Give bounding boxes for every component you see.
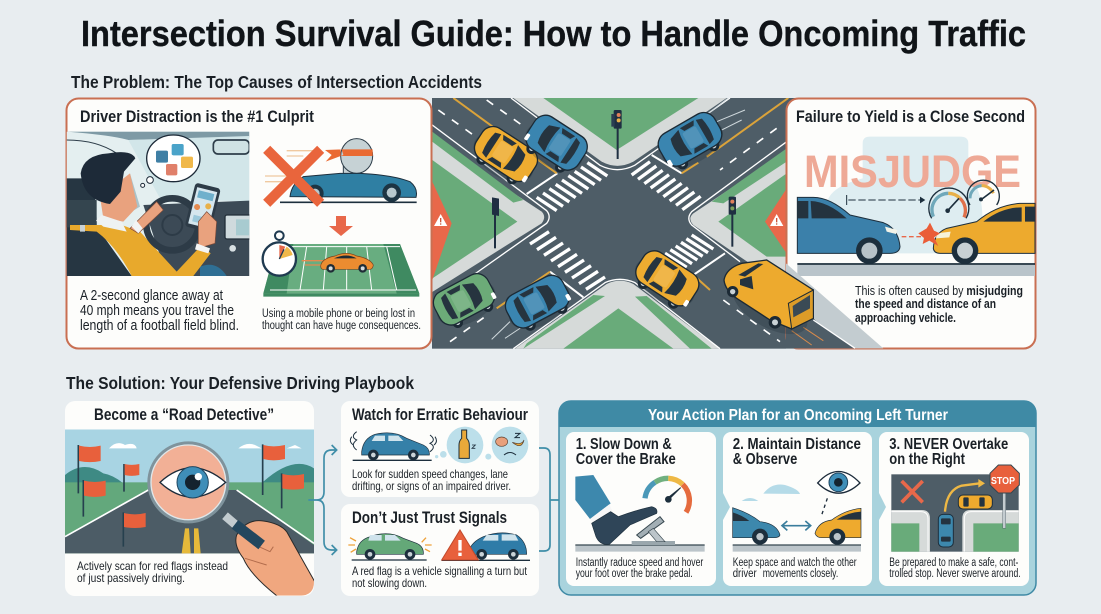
car: green bottom-left [432,272,496,328]
card: slow down [566,432,716,586]
heading: the solution: The Solution: Your Defensive Driving Playbook [66,373,414,393]
heading: the problem: The Problem: The Top Causes of Intersection Accidents [71,72,482,92]
text: scan for red flags: Actively scan for red flags instead [77,559,228,573]
title: Intersection Survival Guide: How to Handle Oncoming Traffic [81,13,1026,54]
panel: erratic behaviour [341,401,539,497]
text: step 2 description: Keep space and watch the other [733,557,857,569]
heading: road detective: Become a “Road Detective” [94,406,274,424]
text: misjudging explanation: the speed and distance of an [855,297,996,311]
panel: failure to yield [786,98,1036,348]
text: step 2 description [733,557,857,580]
traffic light: top [611,110,622,159]
text: step 3 description [889,557,1021,580]
heading: action plan: Your Action Plan for an Oncoming Left Turner [648,407,948,424]
car: blue bottom-left [504,274,572,331]
text: signal description: A red flag is a vehicle signalling a turn but [352,564,528,578]
illustration: road with stop sign [891,465,1019,552]
text: misjudging explanation: This is often caused by misjudging [855,284,1023,298]
icon: hand holding magnifier [225,516,237,526]
text: glance statistic [80,288,239,334]
heading: step 1: 1. Slow Down & [576,436,672,453]
car: orange top-left [474,126,538,184]
text: step 1 description: Instantly raduce speed and hover [576,557,703,569]
heading: don't trust signals: Don’t Just Trust Signals [352,508,507,527]
icon: gauge back [967,180,999,205]
text: step 1 description: your foot over the brake pedal. [576,568,693,580]
traffic light: left [492,197,499,248]
text: misjudging explanation [855,284,1023,325]
text: step 3 description: Be prepared to make a safe, cont- [889,557,1018,569]
warning marker: left [432,182,452,280]
car: yellow van over panel corner [724,260,883,348]
chevron: step 2 to 3 [879,493,886,520]
icon: blue car [442,533,530,560]
arrow: split bracket [308,445,337,555]
illustration: foot over brake with gauge [575,475,705,552]
illustration: magnifier over road with red flags [65,429,317,598]
warning marker: right [765,190,786,252]
heading: erratic behaviour: Watch for Erratic Behaviour [352,405,528,424]
illustration: two cars misjudging distance [797,180,1035,276]
text: stop sign: STOP [991,476,1015,487]
car: blue top-right [658,112,722,170]
panel: don't trust signals [341,504,539,596]
text: scan for red flags [77,559,228,585]
card: never overtake [879,432,1029,586]
icon: bottle [435,427,483,463]
icon: signalling green car [348,534,432,560]
text: misjudge watermark: MISJUDGE [804,146,1021,197]
heading: step 2 [733,436,861,468]
icon: gauge front [929,188,969,218]
text: erratic description [352,467,511,493]
heading: step 3: 3. NEVER Overtake [889,436,1008,453]
text: glance statistic: 40 mph means you travel the [80,303,234,319]
panel: driver distraction [66,98,432,348]
illustration: blindfolded driver car [265,139,417,203]
text: signal description: not slowing down. [352,576,427,590]
heading: step 3 [889,436,1008,468]
text: erratic description: drifting, or signs of an impaired driver. [352,479,511,493]
heading: step 1 [576,436,676,468]
card: maintain distance [723,432,872,586]
car: blue van top [524,114,588,173]
panel: road detective [65,401,317,598]
text: glance statistic: length of a football field blind. [80,318,239,334]
icon: red flags [78,444,304,547]
icon: drowsy face [485,427,528,463]
text: misjudging explanation: approaching vehicle. [855,311,956,325]
illustration: background silhouette [825,137,982,253]
text: step 2 description: movements closely. [763,568,838,580]
icon: down arrow [329,216,353,236]
illustration: stopwatch on football field [263,231,419,297]
arrow: merge bracket into action plan [539,448,563,551]
heading: driver distraction: Driver Distraction is the #1 Culprit [80,107,314,126]
chevron: step 1 to 2 [723,493,730,520]
text: step 1 description [576,557,703,580]
heading: step 2: & Observe [733,451,797,468]
heading: failure to yield: Failure to Yield is a Close Second [796,107,1025,126]
text: glance statistic: A 2-second glance away at [80,288,223,304]
icon: red cross [267,149,321,203]
text: mobile phone note [262,308,421,332]
text: step 2 description: driver [733,568,757,580]
heading: step 2: 2. Maintain Distance [733,436,861,453]
icon: swerving car [350,432,436,460]
text: mobile phone note: thought can have huge consequences. [262,320,421,332]
text: step 3 description: trolled stop. Never swerve around. [889,568,1021,580]
text: erratic description: Look for sudden speed changes, lane [352,467,508,481]
panel: action plan [559,401,1036,595]
illustration: distracted driver with phone [67,132,252,276]
traffic light: right [729,197,736,247]
illustration: two cars keeping distance [733,471,861,552]
header bar [559,401,1036,427]
heading: step 3: on the Right [889,451,966,468]
text: mobile phone note: Using a mobile phone or being lost in [262,308,415,320]
text: signal description [352,564,528,590]
heading: step 1: Cover the Brake [576,451,676,468]
illustration: intersection [428,98,813,349]
icon: warning triangle [442,530,478,560]
car: yellow bottom-right [635,250,700,309]
text: scan for red flags: of just passively driving. [77,571,185,585]
